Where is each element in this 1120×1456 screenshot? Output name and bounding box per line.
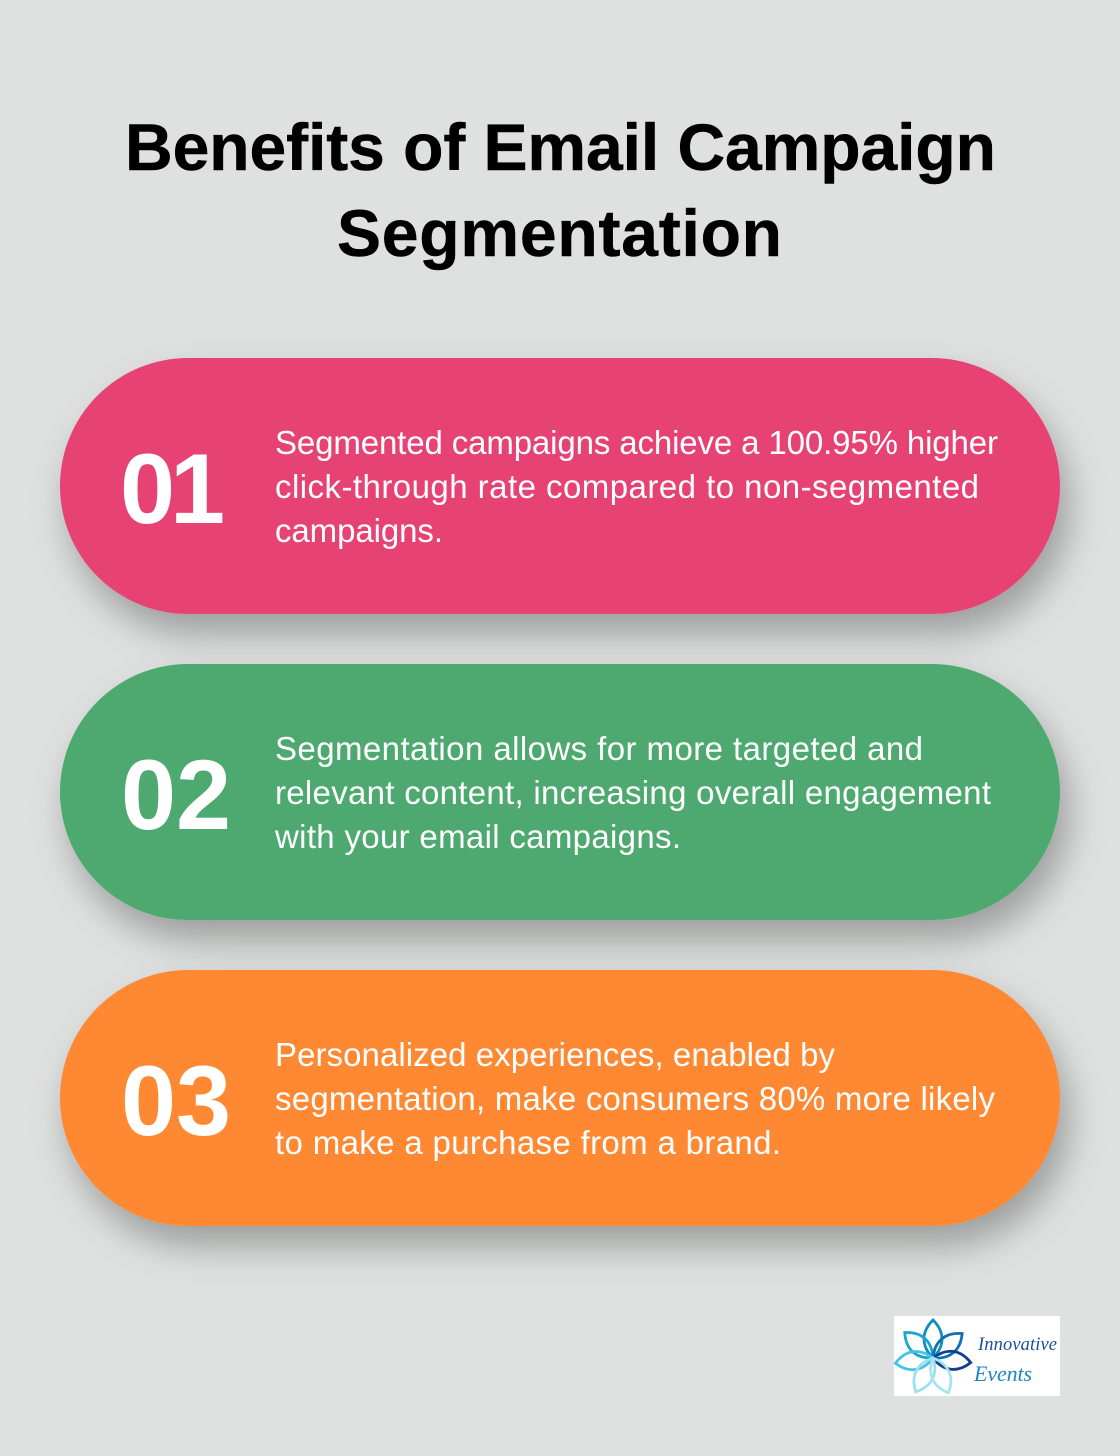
panel: benefit 01 xyxy=(60,358,1060,614)
number 01: 1 xyxy=(170,433,225,544)
text block 01: Segmented campaigns achieve a 100.95% higher xyxy=(275,424,998,461)
text block 01: click-through rate compared to non-segmented xyxy=(275,468,979,505)
text block 01 xyxy=(275,424,998,549)
text block 02: relevant content, increasing overall engagement xyxy=(275,774,991,811)
number 01: 0 xyxy=(120,433,175,544)
pill background orange xyxy=(60,970,1060,1226)
logo: Innovative Events xyxy=(894,1316,1060,1396)
title: Benefits of Email Campaign xyxy=(125,110,996,184)
text block 02: with your email campaigns. xyxy=(274,818,681,855)
text block 03: to make a purchase from a brand. xyxy=(275,1124,781,1161)
number 03: 03 xyxy=(121,1045,231,1156)
text block 03: Personalized experiences, enabled by xyxy=(275,1036,836,1073)
logo wordmark xyxy=(973,1335,1057,1386)
logo wordmark: Innovative xyxy=(977,1335,1057,1355)
pill background green xyxy=(60,664,1060,920)
pill background pink xyxy=(60,358,1060,614)
icon: flower xyxy=(894,1320,972,1396)
title: Segmentation xyxy=(337,196,782,270)
text block 02 xyxy=(274,730,991,855)
text block 01: campaigns. xyxy=(275,512,443,549)
logo wordmark: Events xyxy=(973,1361,1032,1386)
title xyxy=(125,110,996,270)
panel: benefit 02 xyxy=(60,664,1060,920)
number 02: 02 xyxy=(121,739,231,850)
text block 03: segmentation, make consumers 80% more likely xyxy=(275,1080,996,1117)
text block 02: Segmentation allows for more targeted and xyxy=(275,730,923,767)
panel: benefit 03 xyxy=(60,970,1060,1226)
text block 03 xyxy=(275,1036,996,1161)
